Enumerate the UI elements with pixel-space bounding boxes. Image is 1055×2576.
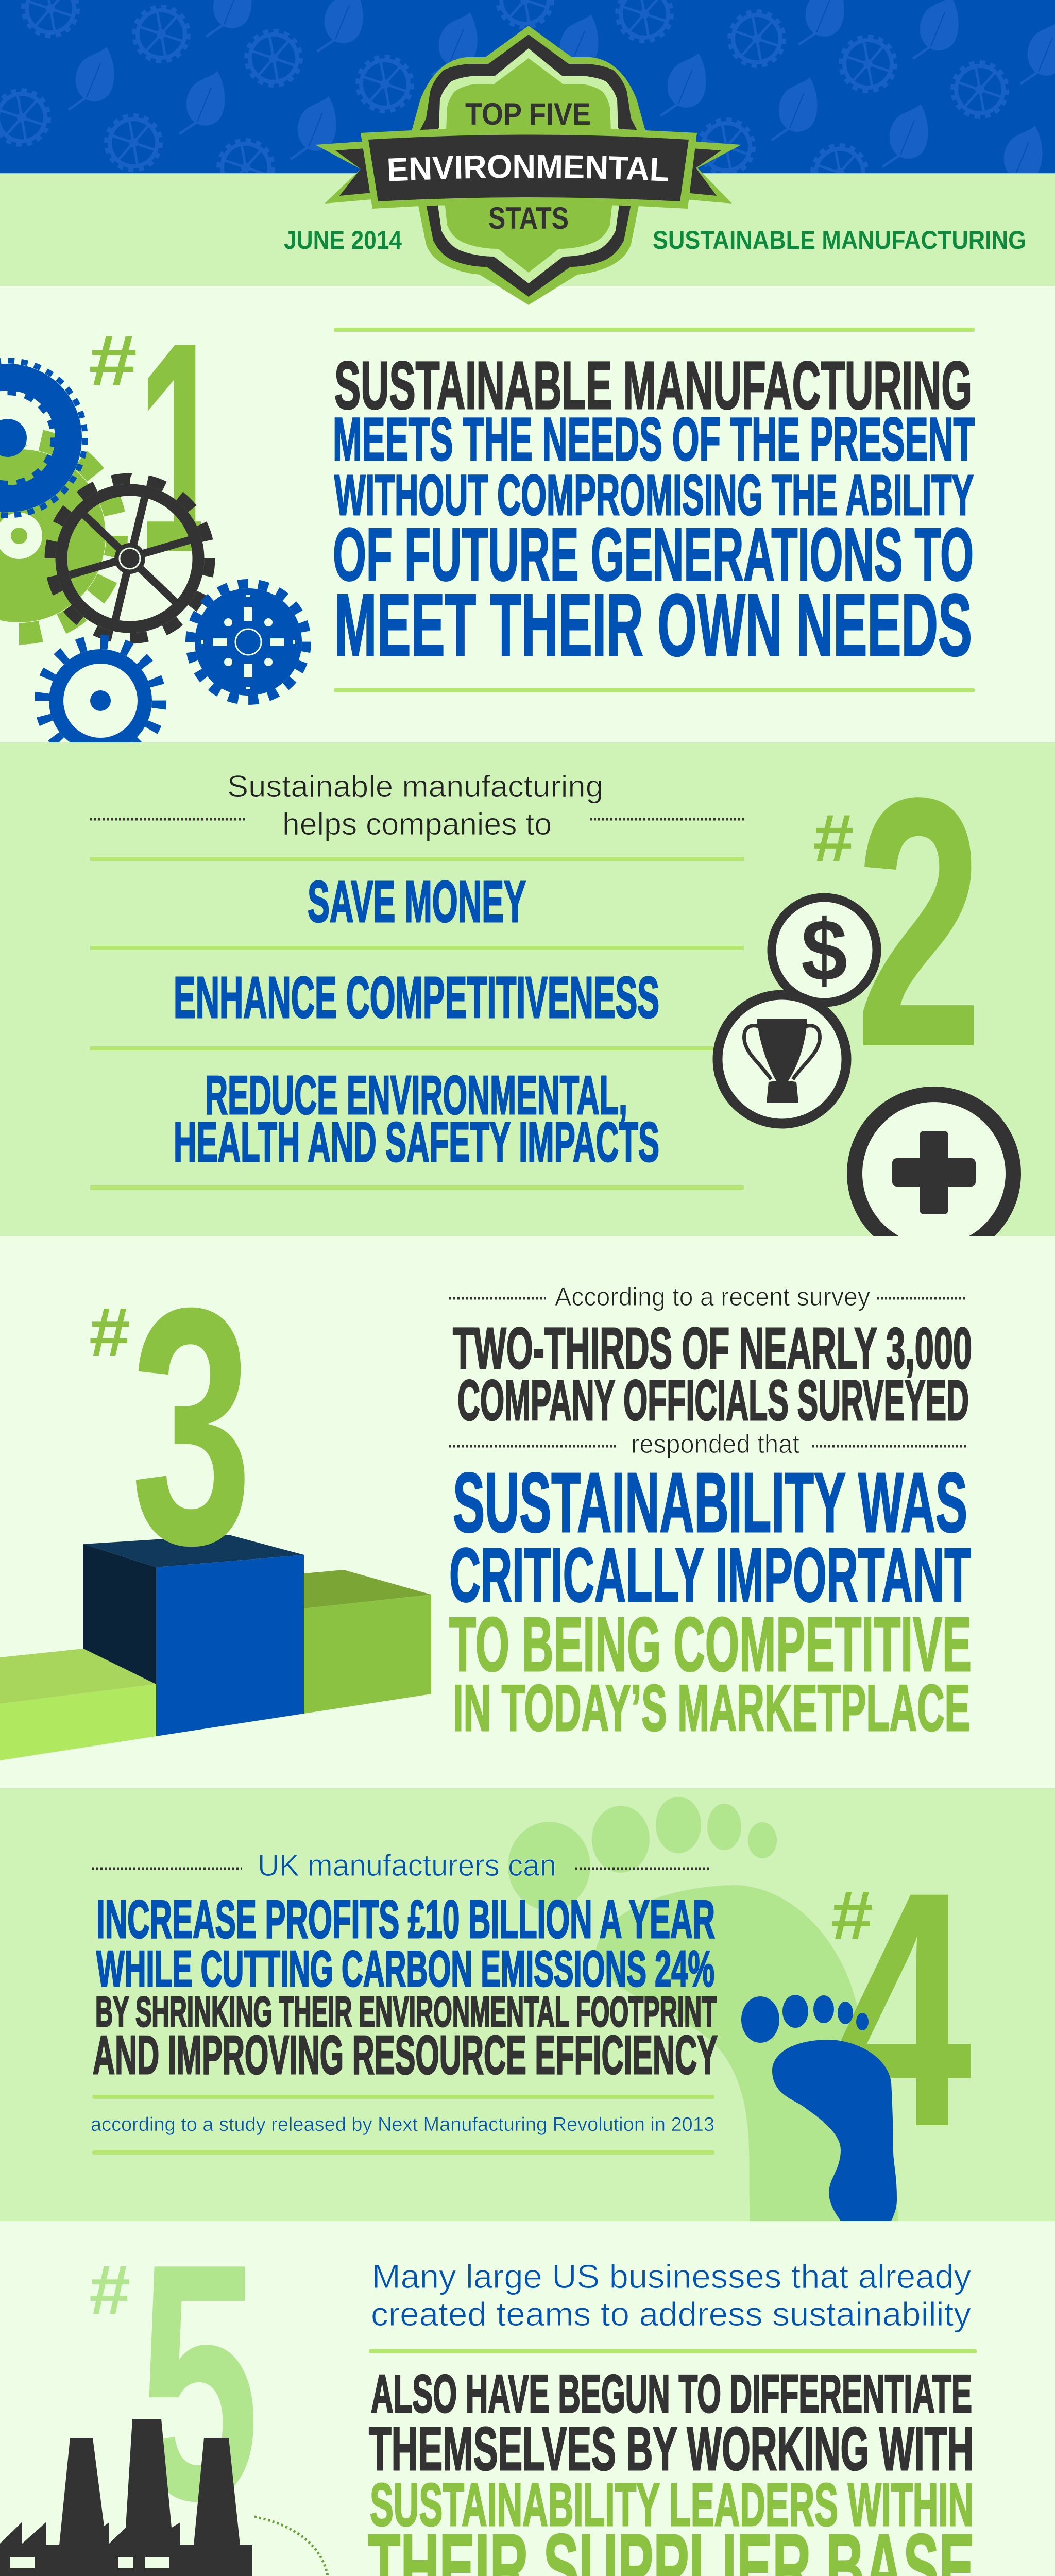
headline block xyxy=(333,347,975,674)
date label: JUNE 2014 xyxy=(284,226,402,255)
icon: dollar coin: $ xyxy=(801,902,847,999)
icon: large pale footprint xyxy=(508,1797,898,2221)
green gear xyxy=(0,438,117,634)
hash sign: # xyxy=(89,1293,130,1371)
number 3: 3 xyxy=(131,1238,252,1615)
benefits list: SAVE MONEY xyxy=(308,869,526,934)
panel: stat 4 xyxy=(0,1788,1055,2221)
intro text xyxy=(90,769,744,841)
intro text: Sustainable manufacturing xyxy=(227,769,603,804)
header date strip xyxy=(0,173,1055,286)
rule xyxy=(334,328,975,332)
icon: gears xyxy=(0,361,307,759)
icon: health cross xyxy=(855,1094,1013,1253)
panel: stat 2 xyxy=(0,724,1055,1253)
study text: UK manufacturers can xyxy=(258,1849,556,1883)
bottom label: STATS xyxy=(488,201,569,235)
icon: trophy xyxy=(718,995,846,1124)
badge xyxy=(315,26,741,305)
header background pattern xyxy=(0,0,1055,173)
number 5: # xyxy=(89,2251,130,2329)
banner: ENVIRONMENTAL xyxy=(388,155,669,181)
icon: large factory xyxy=(0,2419,252,2576)
stat text: created teams to address sustainability xyxy=(371,2295,972,2333)
shield xyxy=(412,26,645,305)
banner xyxy=(361,129,697,209)
rules xyxy=(90,859,744,1188)
survey text: According to a recent survey xyxy=(555,1282,870,1311)
number 2: # xyxy=(813,800,854,875)
number 2 xyxy=(814,797,974,1045)
stat text: Many large US businesses that already xyxy=(372,2258,972,2295)
stat text xyxy=(368,2258,977,2576)
survey text: responded that xyxy=(631,1430,799,1459)
ribbon wings xyxy=(315,141,741,204)
study text xyxy=(91,1849,718,2155)
number 2: 2 xyxy=(855,724,983,1121)
rule xyxy=(334,688,975,692)
top label: TOP FIVE xyxy=(465,97,591,131)
dotted arrows xyxy=(91,2517,328,2576)
benefits list: HEALTH AND SAFETY IMPACTS xyxy=(174,1111,659,1174)
panel: stat 5 xyxy=(0,2193,1055,2576)
number 1: # xyxy=(89,320,137,401)
study text: according to a study released by Next Manufacturing Revolution in 2013 xyxy=(91,2114,714,2136)
benefits list: ENHANCE COMPETITIVENESS xyxy=(174,965,659,1030)
benefits list: REDUCE ENVIRONMENTAL, xyxy=(205,1065,627,1126)
number 1 xyxy=(90,336,201,551)
benefits list xyxy=(174,869,659,1174)
dark spoked gear xyxy=(50,479,210,638)
blue lower gear xyxy=(42,642,159,759)
icon: dollar coin xyxy=(772,897,877,1003)
survey text xyxy=(449,1282,972,1744)
panel: stat 1 xyxy=(0,328,975,742)
number 4: # xyxy=(831,1876,873,1954)
intro text: helps companies to xyxy=(282,807,552,841)
number 5: 5 xyxy=(138,2193,260,2570)
blue large gear xyxy=(0,361,85,515)
blue solid gear xyxy=(190,584,307,700)
number 1: 1 xyxy=(137,279,225,616)
number 4: 4 xyxy=(836,1822,974,2196)
icon: blue footprint xyxy=(741,1995,897,2221)
number 5 xyxy=(89,2193,260,2570)
icon: podium xyxy=(0,1535,431,1760)
panel: stat 3 xyxy=(0,1236,1055,1788)
